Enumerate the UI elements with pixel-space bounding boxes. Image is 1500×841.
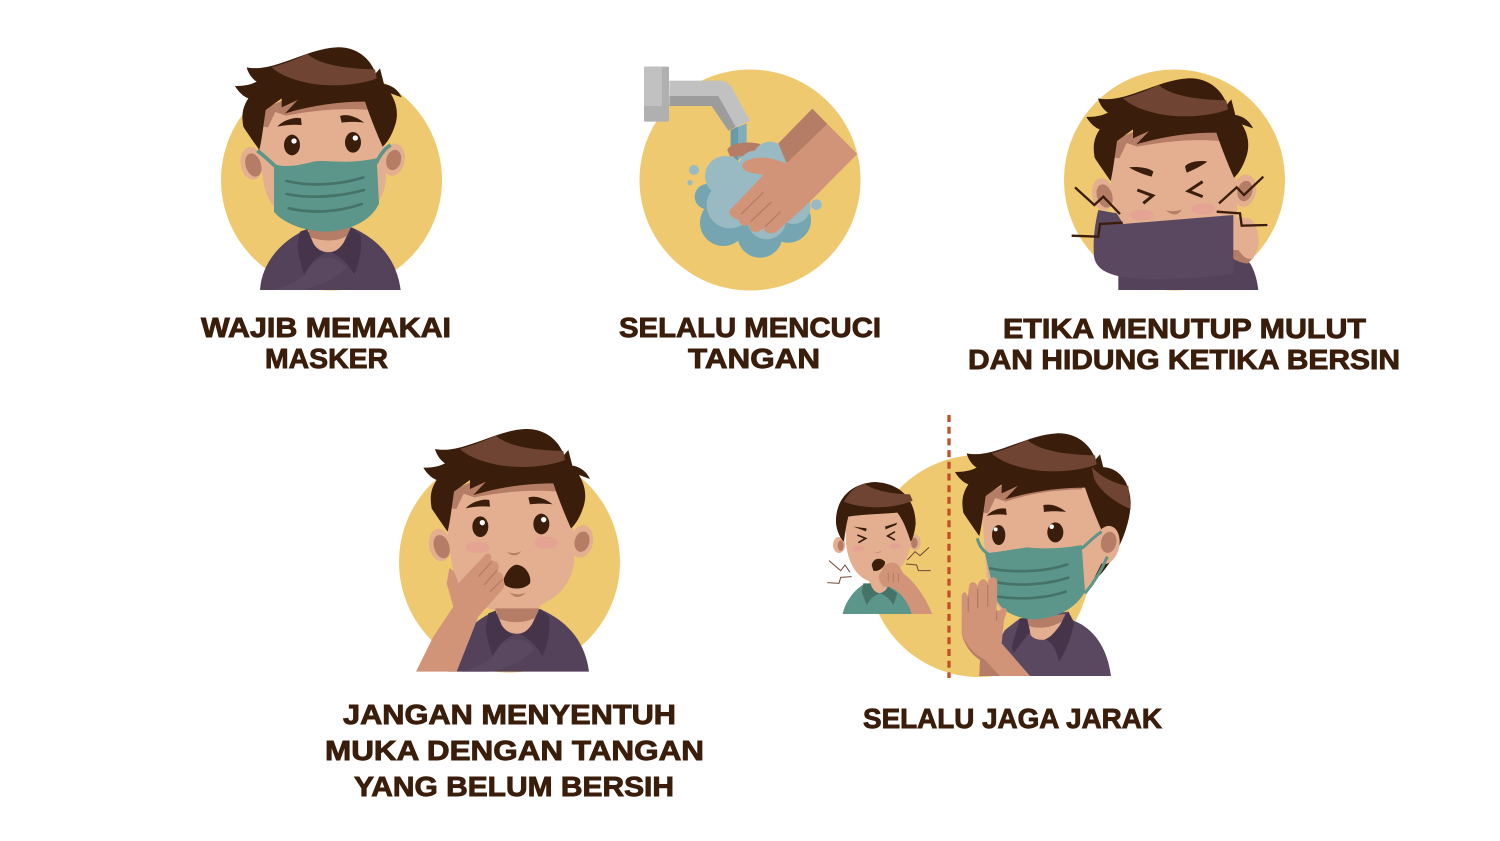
heading: jangan menyentuh muka: JANGAN MENYENTUH	[343, 699, 676, 730]
heading: etika menutup mulut	[968, 313, 1400, 375]
heading: selalu mencuci tangan: TANGAN	[688, 343, 820, 374]
illustration: yellow circle	[868, 455, 1090, 677]
heading: wajib memakai masker: WAJIB MEMAKAI	[201, 312, 451, 343]
illustration: yellow circle	[221, 70, 442, 290]
illustration: man sneezing into elbow	[1072, 78, 1267, 290]
heading: etika menutup mulut: DAN HIDUNG KETIKA BERSIN	[968, 344, 1400, 375]
illustration: yellow circle	[1064, 70, 1285, 290]
heading: wajib memakai masker: MASKER	[265, 343, 388, 374]
illustration: faucet and washing hands	[644, 67, 857, 258]
heading: jangan menyentuh muka	[325, 699, 704, 802]
panel: selalu jaga jarak	[827, 415, 1162, 734]
heading: jangan menyentuh muka: MUKA DENGAN TANGAN	[325, 735, 704, 766]
illustration: yellow circle	[640, 70, 860, 290]
panel: jangan menyentuh muka	[325, 429, 704, 802]
panel: selalu mencuci tangan	[619, 67, 881, 374]
heading: selalu mencuci tangan	[619, 312, 881, 374]
illustration: yellow circle	[399, 452, 620, 672]
heading: selalu jaga jarak: SELALU JAGA JARAK	[863, 703, 1162, 734]
heading: etika menutup mulut: ETIKA MENUTUP MULUT	[1003, 313, 1366, 344]
illustration: man touching his face	[416, 429, 596, 672]
illustration: large man wearing a mask raising his hand	[955, 433, 1131, 676]
illustration: small man coughing	[827, 482, 932, 614]
heading: selalu mencuci tangan: SELALU MENCUCI	[619, 312, 881, 343]
illustration: man wearing a mask	[235, 47, 407, 290]
heading: wajib memakai masker	[201, 312, 451, 374]
panel: wajib memakai masker	[201, 47, 451, 374]
heading: jangan menyentuh muka: YANG BELUM BERSIH	[354, 771, 674, 802]
panel: etika menutup mulut	[968, 70, 1400, 375]
divider: dashed distance line	[947, 415, 951, 678]
